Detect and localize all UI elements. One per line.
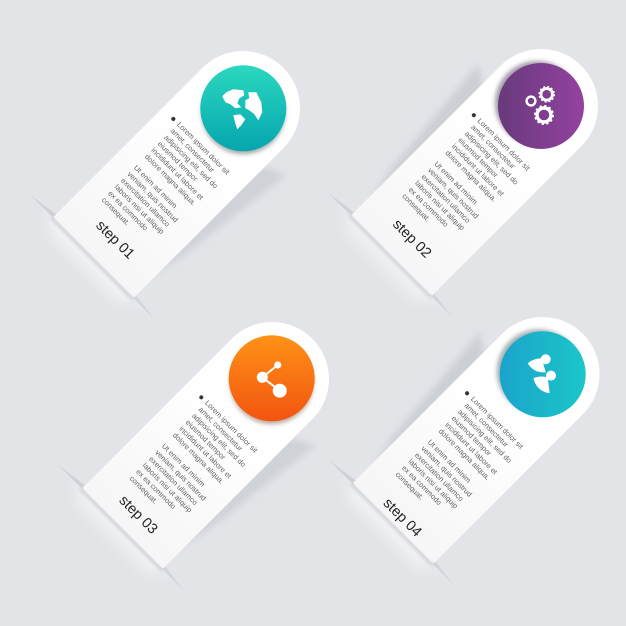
text block: consequat. (100, 195, 132, 227)
card (353, 293, 623, 564)
text block: amet, consectetur (463, 401, 511, 449)
text block: incididunt ut labore et (450, 142, 506, 198)
text block: exercitation ullamco (147, 454, 200, 507)
bullet (198, 395, 204, 400)
icon: globe (200, 65, 286, 154)
text block: dolore magna aliqua. (437, 427, 492, 482)
text block: exercitation ullamco (420, 172, 472, 225)
panel: step 02 (329, 49, 598, 316)
text block: ex ea commodo (106, 189, 150, 232)
text block: Lorem ipsum dolor sit (476, 116, 532, 173)
bullet (171, 116, 176, 122)
panel: step 04 (330, 317, 600, 584)
text block: adipisicing elit, sed do (162, 133, 220, 190)
text block: laboris nisi ut aliquip (413, 179, 467, 232)
text block: amet, consectetur (197, 405, 245, 453)
step label: step 04 (380, 495, 425, 540)
text block: amet, consectetur (469, 123, 517, 171)
text block (128, 398, 261, 531)
text block: Lorem ipsum dolor sit (203, 398, 259, 455)
text block: Ut enim ad minim (132, 163, 179, 210)
text block: Lorem ipsum dolor sit (469, 395, 525, 451)
text block: adipisicing elit, sed do (463, 129, 520, 187)
text block: incididunt ut labore et (177, 424, 233, 480)
panel: step 01 (31, 51, 300, 318)
text block: veniam, quis nostrud (153, 448, 208, 503)
text block: ex ea commodo (400, 463, 444, 507)
card (53, 27, 324, 298)
step label: step 03 (116, 493, 160, 538)
text block: Ut enim ad minim (432, 159, 479, 206)
text block: dolore magna aliqua. (443, 148, 499, 204)
text block: consequat. (128, 474, 160, 506)
text block: ex ea commodo (134, 467, 178, 511)
text block: incididunt ut labore et (443, 420, 499, 476)
text block: consequat. (394, 470, 426, 502)
text block: laboris nisi ut aliquip (407, 457, 460, 510)
text block: Lorem ipsum dolor sit (175, 120, 231, 176)
text block: Ut enim ad minim (426, 438, 473, 485)
text block: exercitation ullamco (413, 451, 466, 503)
step label: step 01 (92, 218, 137, 263)
text block (100, 120, 233, 253)
text block (394, 395, 526, 527)
icon: people (497, 329, 586, 417)
text block: dolore magna aliqua. (143, 152, 198, 207)
icon: share (229, 335, 315, 424)
text block: eiusmod tempor (450, 414, 494, 458)
text block: eiusmod tempor (184, 418, 228, 462)
bullet (464, 390, 470, 396)
text block (400, 116, 533, 249)
text block: consequat. (400, 192, 432, 224)
text block: laboris nisi ut aliquip (141, 461, 194, 514)
text block: incididunt ut labore et (149, 146, 205, 202)
card (351, 25, 622, 296)
text block: Ut enim ad minim (160, 442, 207, 489)
text block: adipisicing elit, sed do (190, 411, 248, 469)
text block: ex ea commodo (407, 185, 450, 229)
text block: amet, consectetur (169, 126, 217, 175)
text block: laboris nisi ut aliquip (113, 182, 166, 236)
card (82, 298, 353, 569)
text block: veniam, quis nostrud (126, 170, 180, 224)
text block: adipisicing elit, sed do (456, 407, 514, 465)
icon: gears (495, 61, 584, 149)
text block: veniam, quis nostrud (426, 166, 481, 220)
panel: step 03 (60, 322, 329, 589)
text block: eiusmod tempor (156, 139, 200, 184)
text block: eiusmod tempor (456, 136, 501, 180)
text block: exercitation ullamco (119, 176, 172, 229)
step label: step 02 (389, 217, 434, 261)
bullet (471, 112, 477, 118)
text block: dolore magna aliqua. (171, 431, 226, 486)
text block: veniam, quis nostrud (419, 444, 474, 499)
